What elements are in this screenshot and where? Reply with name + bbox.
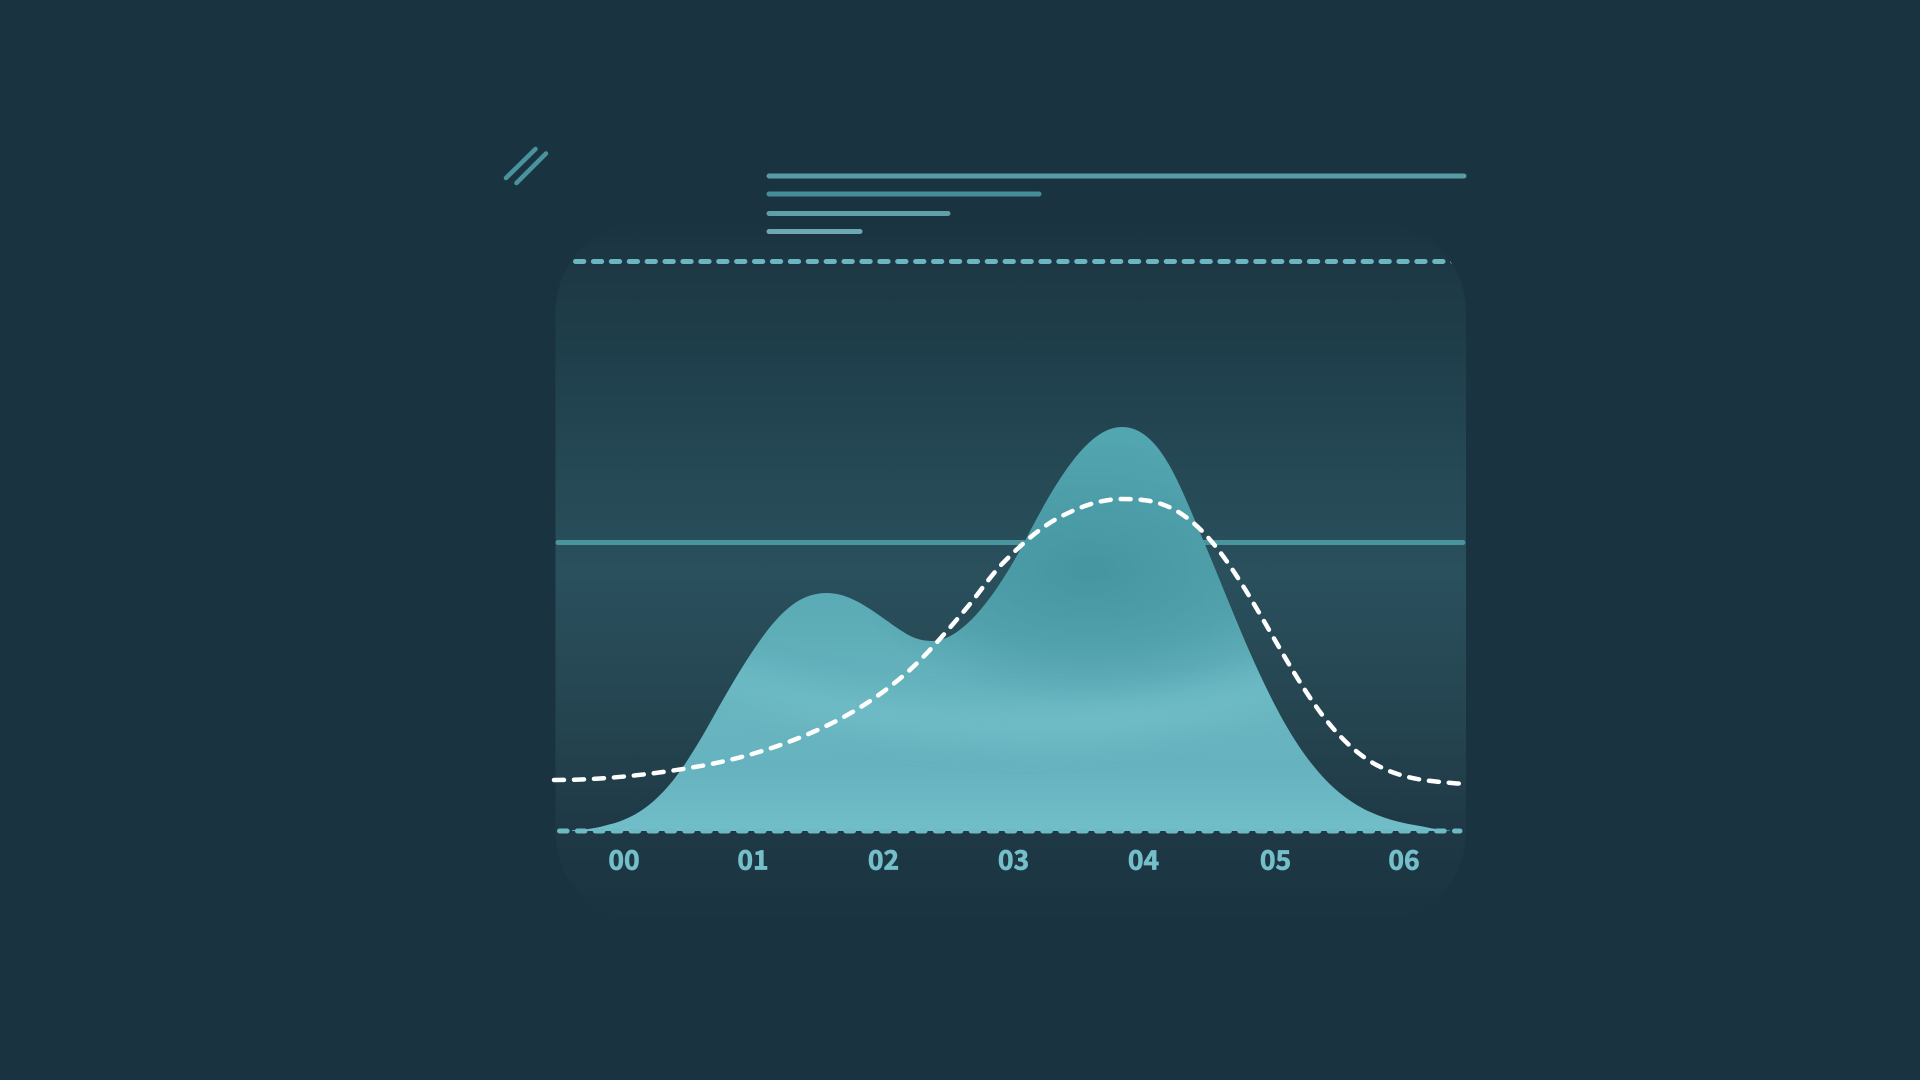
axis labels: 01 [737, 838, 769, 878]
axis labels: 00 [608, 838, 640, 878]
top dashed reference line [576, 259, 1460, 264]
axis labels: 03 [998, 838, 1029, 878]
axis labels: 02 [868, 838, 899, 878]
horizontal mean line [558, 540, 1463, 545]
panel: chart background [556, 222, 1466, 922]
title placeholder lines [769, 176, 1464, 232]
axis labels: 05 [1260, 838, 1291, 878]
axis labels: 04 [1128, 838, 1159, 878]
axis labels: 06 [1388, 838, 1420, 878]
icon: double slash [506, 149, 546, 183]
area chart [555, 420, 1467, 835]
white dashed curve [554, 499, 1468, 784]
axis labels [608, 838, 1420, 878]
baseline dashed axis [560, 828, 1460, 834]
